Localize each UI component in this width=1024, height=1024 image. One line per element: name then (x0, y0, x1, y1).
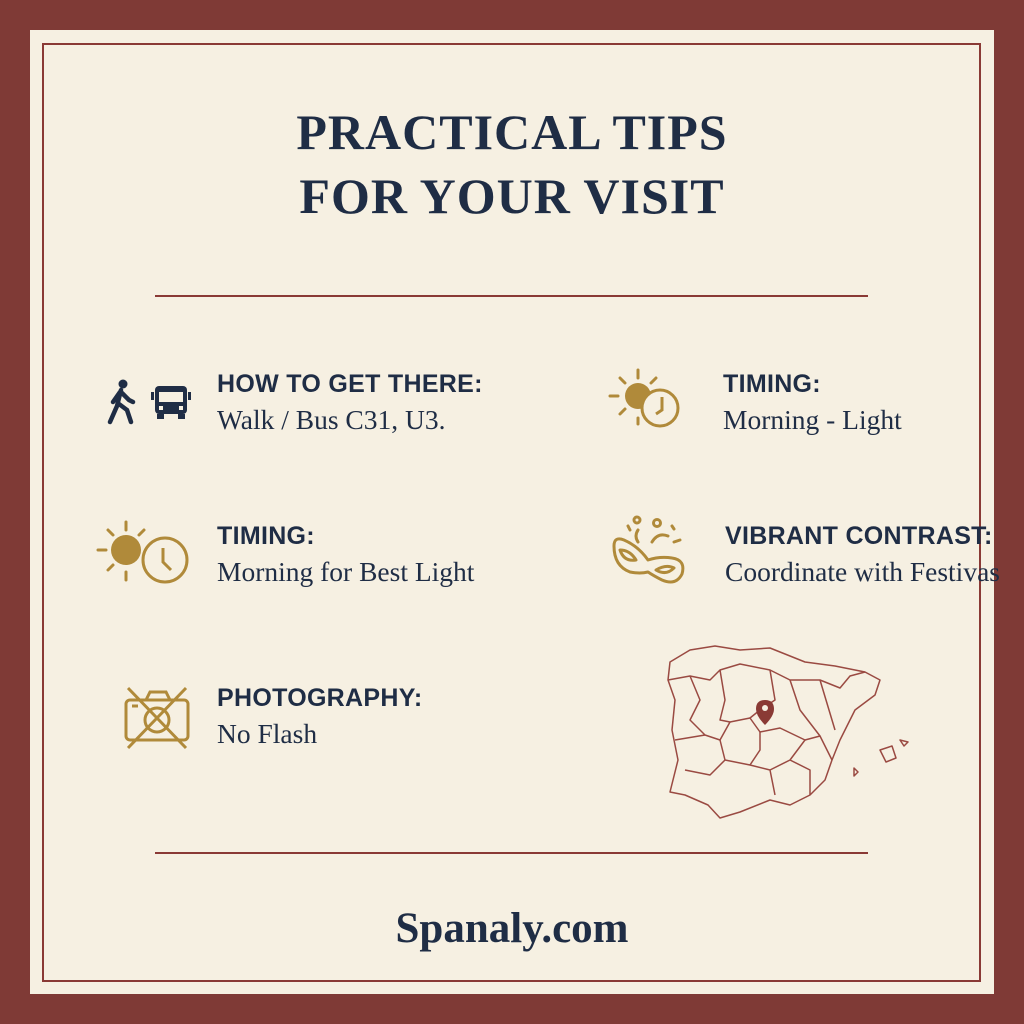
item: photography (217, 684, 422, 749)
item: timing left: TIMING: (217, 522, 315, 550)
title: PRACTICAL TIPS (296, 104, 728, 160)
item: timing left (217, 522, 474, 587)
title (296, 104, 728, 224)
item: how to get there (217, 370, 483, 435)
icon: mask confetti (612, 516, 684, 584)
footer: website: Spanaly.com (396, 905, 628, 952)
item: timing left: Morning for Best Light (217, 556, 474, 587)
map of spain (667, 645, 909, 819)
item: timing right (723, 370, 902, 435)
icon: sun clock left (96, 520, 188, 584)
icon: no camera (124, 687, 190, 749)
map pin (756, 700, 774, 725)
item: timing right: TIMING: (723, 370, 821, 398)
item: how to get there: Walk / Bus C31, U3. (217, 404, 446, 435)
item: photography: No Flash (217, 718, 317, 749)
item: photography: PHOTOGRAPHY: (217, 684, 422, 712)
item: vibrant contrast: Coordinate with Festivas (725, 556, 1000, 587)
icon: walk and bus (108, 380, 191, 424)
item: how to get there: HOW TO GET THERE: (217, 370, 483, 398)
item: vibrant contrast (725, 522, 1000, 587)
icon: sun clock right (608, 368, 680, 428)
item: vibrant contrast: VIBRANT CONTRAST: (725, 522, 993, 550)
title: FOR YOUR VISIT (299, 168, 725, 224)
item: timing right: Morning - Light (723, 404, 902, 435)
